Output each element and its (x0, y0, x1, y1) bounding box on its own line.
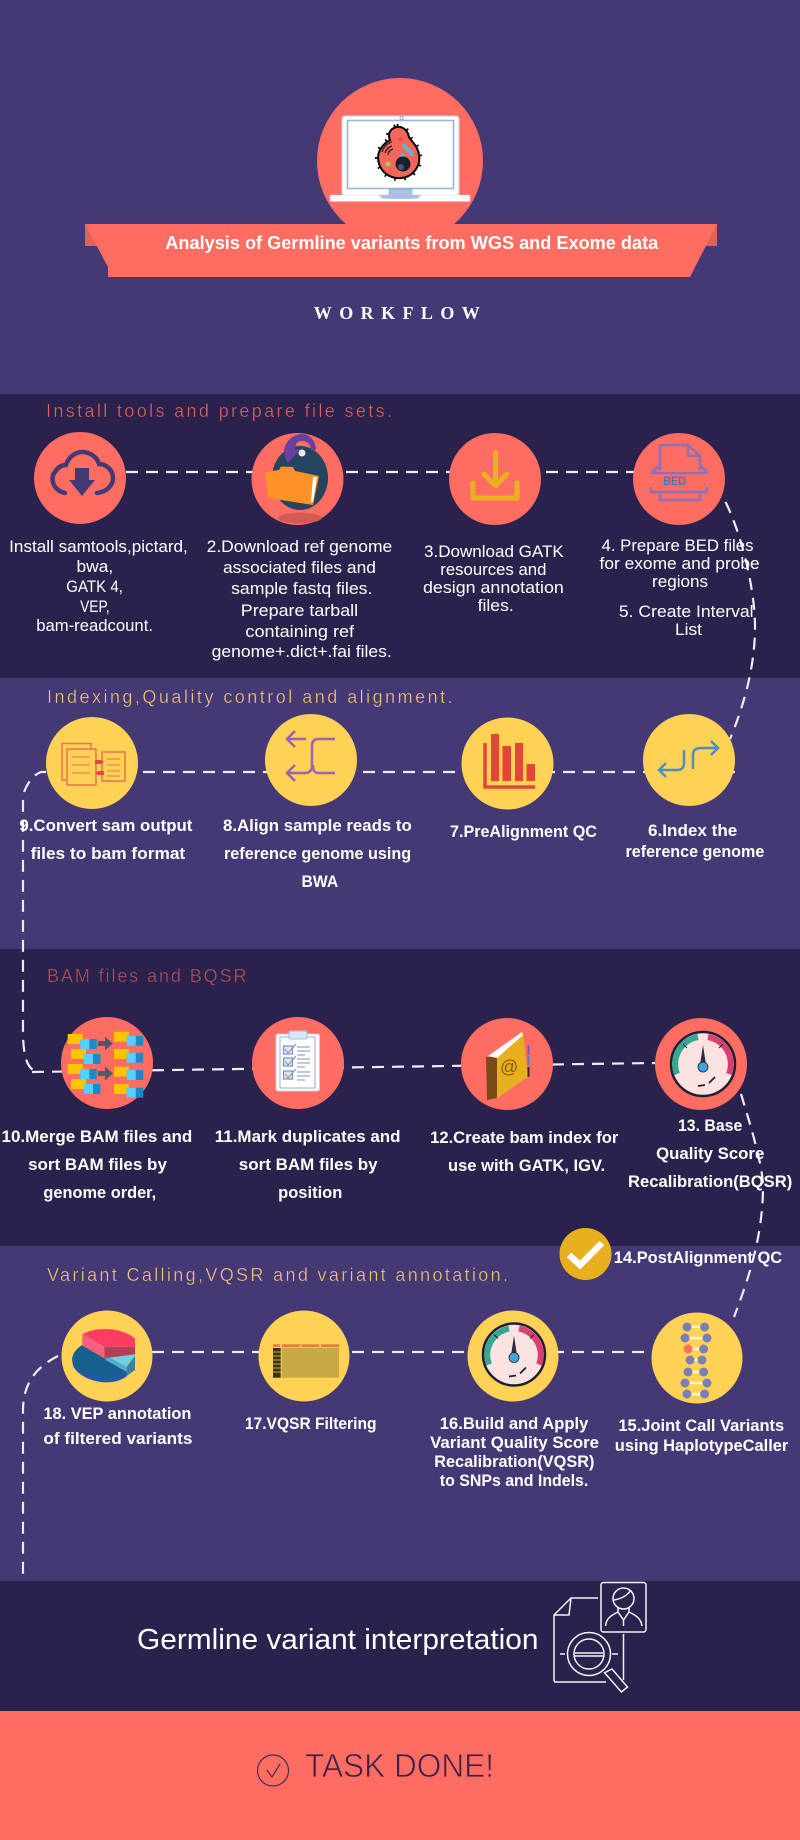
panel: germline variant interpretation (0, 1581, 800, 1711)
step 12 icon: address book: @ (500, 1057, 518, 1077)
step 13 text (628, 1116, 792, 1191)
step 13 text: 13. Base (678, 1116, 742, 1135)
step 4 and 5 text: 4. Prepare BED files (602, 536, 754, 555)
step 18 text: of filtered variants (43, 1429, 192, 1448)
step 6 text: 6.Index the (648, 821, 737, 840)
panel background: indexing (0, 678, 800, 949)
subtitle: workflow: WORKFLOW (314, 303, 480, 323)
step 11 text (215, 1127, 400, 1202)
step 12 text: use with GATK, IGV. (448, 1156, 605, 1175)
panel: header (0, 0, 800, 394)
step 8 text: reference genome using (224, 844, 411, 863)
step 8 text: BWA (302, 872, 338, 891)
step 3 text: design annotation (423, 578, 564, 597)
step 17 icon: filter table (258, 1310, 350, 1402)
hero circle (317, 78, 483, 244)
step 2 text: associated files and (223, 558, 376, 577)
step 13 text: Quality Score (656, 1144, 764, 1163)
title ribbon (85, 224, 717, 277)
panel: task done (0, 1711, 800, 1840)
step 4 and 5 text: 5. Create Interval (619, 602, 754, 621)
step 10 text: 10.Merge BAM files and (2, 1127, 192, 1146)
panel background: header (0, 0, 800, 394)
panel background: task done (0, 1711, 800, 1840)
step 14 icon: check badge (560, 1228, 612, 1280)
step 2 text: sample fastq files. (231, 579, 372, 598)
step 16 text: Variant Quality Score (430, 1433, 599, 1452)
panel background: install tools (0, 394, 800, 678)
step 6 text (626, 821, 764, 861)
step 9 text: 9.Convert sam output (19, 816, 193, 835)
step 13 text: Recalibration(BQSR) (628, 1172, 792, 1191)
interpretation label: Germline variant interpretation (137, 1624, 538, 1656)
step 2 text (207, 537, 392, 661)
step 3 text: 3.Download GATK (424, 542, 564, 561)
step 13 icon: gauge (655, 1018, 747, 1110)
step 7 icon: bar chart (462, 718, 554, 810)
step 18 icon: pie chart (62, 1310, 152, 1402)
step 12 icon: address book (461, 1018, 553, 1110)
step 16 text (430, 1414, 599, 1490)
step 7 text: 7.PreAlignment QC (450, 822, 597, 841)
step 10 text: sort BAM files by (28, 1155, 167, 1174)
step 8 icon: alignment arrows (265, 714, 357, 806)
step 16 text: Recalibration(VQSR) (434, 1452, 594, 1471)
step 18 text: 18. VEP annotation (43, 1404, 191, 1423)
step 1 text: Install samtools,pictard, (9, 537, 188, 556)
step 18 text (43, 1404, 192, 1448)
step 8 text: 8.Align sample reads to (223, 816, 412, 835)
step 17 text: 17.VQSR Filtering (245, 1414, 376, 1433)
panel background: interpretation (0, 1581, 800, 1711)
step 15 icon: DNA (652, 1312, 742, 1404)
step 4 and 5 text: List (675, 620, 702, 639)
step 6 text: reference genome (626, 842, 764, 861)
step 2 icon: folder (252, 433, 344, 525)
step 11 text: position (278, 1183, 342, 1202)
step 1 text: bwa, (76, 557, 113, 576)
step 9 text: files to bam format (31, 844, 186, 863)
step 4 icon: BED file printer: BED (663, 474, 686, 488)
panel: indexing and alignment (0, 678, 800, 949)
step 12 text (430, 1128, 619, 1175)
panel: BAM files and BQSR (0, 949, 800, 1246)
step 11 icon: clipboard (252, 1017, 344, 1109)
step 1 text: GATK 4, (66, 577, 123, 596)
step 16 text: 16.Build and Apply (440, 1414, 589, 1433)
step 16 text: to SNPs and Indels. (440, 1471, 588, 1490)
step 6 icon: index arrows (643, 714, 735, 806)
step 16 icon: gauge (468, 1310, 558, 1402)
step 1 text: bam-readcount. (36, 616, 153, 635)
step 2 text: Prepare tarball (241, 601, 358, 620)
step 1 text (9, 537, 188, 635)
step 1 text: VEP, (80, 597, 110, 616)
step 4 and 5 text: for exome and probe (600, 554, 760, 573)
step 4 icon: BED file printer (633, 433, 725, 525)
step 4 and 5 text (600, 536, 760, 639)
step 15 text (615, 1416, 789, 1455)
dashed workflow connectors (23, 472, 763, 1574)
step 12 text: 12.Create bam index for (430, 1128, 619, 1147)
step 3 text: resources and (440, 560, 546, 579)
step 4 and 5 text: regions (652, 572, 708, 591)
panel: install tools (0, 394, 800, 678)
step 3 icon: download tray (449, 433, 541, 525)
step 10 icon: merged blocks (61, 1017, 153, 1109)
step 14 text: 14.PostAlignment QC (614, 1248, 782, 1267)
icon: laptop with cell (330, 116, 470, 202)
step 9 text (19, 816, 193, 863)
task done label: TASK DONE! (305, 1747, 494, 1784)
step 2 text: genome+.dict+.fai files. (212, 642, 392, 661)
step 15 text: 15.Joint Call Variants (618, 1416, 784, 1435)
icon: check circle (258, 1755, 288, 1786)
heading: Variant Calling,VQSR and variant annotation. (47, 1265, 508, 1285)
panel: variant calling (0, 1228, 800, 1581)
heading: Indexing,Quality control and alignment. (47, 687, 453, 707)
step 8 text (223, 816, 412, 891)
step 2 text: 2.Download ref genome (207, 537, 392, 556)
step 10 text: genome order, (43, 1183, 156, 1202)
panel background: variant calling (0, 1246, 800, 1581)
heading: BAM files and BQSR (47, 966, 246, 986)
step 1 icon: cloud download (34, 432, 126, 524)
step 9 icon: sam to bam documents (46, 717, 138, 809)
step 15 text: using HaplotypeCaller (615, 1436, 789, 1455)
step 3 text (423, 542, 564, 615)
step 3 text: files. (478, 596, 514, 615)
step 10 text (2, 1127, 192, 1202)
icon: document, person card and magnifier (554, 1582, 646, 1692)
step 11 text: sort BAM files by (239, 1155, 378, 1174)
title: Analysis of Germline variants from WGS and Exome data (165, 233, 659, 253)
heading: Install tools and prepare file sets. (46, 401, 392, 421)
panel background: BAM files (0, 949, 800, 1246)
step 2 text: containing ref (245, 622, 354, 641)
step 11 text: 11.Mark duplicates and (215, 1127, 400, 1146)
